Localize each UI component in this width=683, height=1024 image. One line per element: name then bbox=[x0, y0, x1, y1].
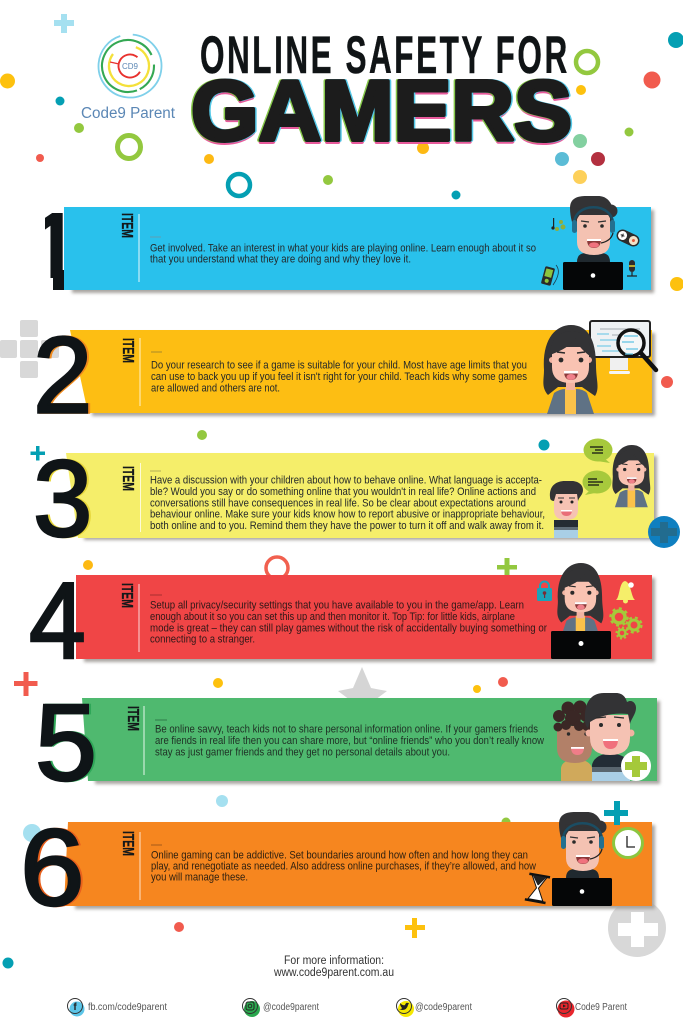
footer: more information: www.code9parent.com.au bbox=[273, 967, 394, 979]
icon: microphone bbox=[627, 260, 637, 276]
body text: Be online savvy, teach kids not to share personal information online. If your gamers friends bbox=[155, 724, 538, 736]
grey plus blocks left of item 2 bbox=[0, 320, 59, 378]
illustration: computer monitor and magnifying glass bbox=[590, 321, 656, 374]
social: twitter bbox=[396, 998, 472, 1017]
illustration: gamer with laptop bbox=[552, 812, 612, 906]
icon: bell bbox=[616, 581, 635, 604]
body text: both online and to you. Remind them they have the power to turn it off and walk away from it. bbox=[150, 520, 544, 532]
body text: behaviour online. Make sure your kids know how to report abusive or inappropriate behaviour, bbox=[150, 508, 545, 520]
item label: ITEM bbox=[124, 706, 141, 731]
title: gamers: GAMERS bbox=[190, 64, 570, 159]
illustration: curly haired child bbox=[553, 700, 592, 781]
item label: ITEM bbox=[118, 583, 135, 608]
footer: more information: For more information: bbox=[284, 955, 384, 967]
icon: green plus badge bbox=[621, 751, 651, 781]
body text bbox=[150, 242, 536, 266]
illustration: boy bbox=[550, 481, 583, 538]
body text bbox=[150, 600, 547, 646]
icon: gears bbox=[610, 608, 642, 638]
body text: ble? Would you say or do something online that you wouldn't in real life? Online actions and bbox=[150, 486, 536, 498]
title: online safety for: ONLINE SAFETY FOR bbox=[200, 27, 567, 85]
icon: game controller bbox=[615, 227, 641, 249]
social: youtube: Code9 Parent bbox=[575, 1002, 627, 1013]
item label: ITEM bbox=[119, 466, 136, 491]
social: facebook: f bbox=[73, 1002, 77, 1013]
logo: Code9 Parent bbox=[81, 32, 176, 122]
body text: Do your research to see if a game is suitable for your child. Most have age limits that you bbox=[151, 360, 527, 372]
number 3: 3 bbox=[35, 437, 94, 559]
illustration: woman bbox=[557, 563, 603, 639]
number 2: 2 bbox=[35, 313, 94, 436]
social: instagram bbox=[242, 998, 319, 1017]
illustration: woman bbox=[543, 325, 598, 414]
number 3: 3 bbox=[33, 437, 92, 559]
title: gamers: GAMERS bbox=[191, 66, 572, 161]
body text bbox=[150, 474, 545, 532]
body text bbox=[151, 850, 536, 884]
title: gamers: GAMERS bbox=[192, 64, 574, 159]
illustration: speech bubbles bbox=[582, 438, 612, 495]
icon: clock bbox=[614, 828, 642, 858]
icon: teal plus bbox=[604, 801, 628, 825]
grey plus circle bottom right bbox=[608, 899, 666, 957]
logo: Code9 Parent: CD9 bbox=[122, 62, 139, 71]
body text: play, and renegotiate as needed. Also address online purchases, if they’re allowed, and how bbox=[151, 860, 536, 872]
illustration: woman bbox=[612, 445, 650, 507]
body text: Setup all privacy/security settings that you have available to you in the game/app. Learn bbox=[150, 600, 524, 612]
body text: that you understand what they are doing and why they love it. bbox=[150, 254, 411, 266]
body text: conversations still have consequences in real life. So be clear about expectations around bbox=[150, 498, 526, 510]
panel: item 6 bbox=[20, 801, 655, 928]
body text: you will manage these. bbox=[151, 872, 248, 884]
number 4: 4 bbox=[29, 560, 86, 682]
icon: padlock bbox=[537, 582, 552, 601]
icon: hourglass bbox=[525, 872, 550, 904]
icon: music notes bbox=[551, 218, 566, 231]
number 6: 6 bbox=[20, 806, 85, 928]
number 6: 6 bbox=[22, 806, 87, 928]
body text bbox=[155, 724, 544, 758]
body text: can use to back you up if you feel it isn't right for your child. Teach kids why some games bbox=[151, 371, 527, 383]
body text: Online gaming can be addictive. Set boundaries around how often and how long they can bbox=[151, 850, 528, 862]
item label: ITEM bbox=[118, 213, 135, 238]
icon: laptop bbox=[551, 631, 611, 659]
panel: item 3 bbox=[33, 437, 680, 559]
logo: Code9 Parent: Code9 Parent bbox=[81, 105, 176, 122]
number 5: 5 bbox=[35, 682, 97, 804]
number 5: 5 bbox=[37, 682, 99, 804]
illustration: teen boy bbox=[585, 693, 636, 781]
panel: item 4 bbox=[29, 560, 655, 682]
body text: enough about it so you can set this up and then monitor it. Top Tip: for little kids, airplane bbox=[150, 611, 515, 623]
title: gamers: GAMERS bbox=[191, 64, 572, 159]
body text: connecting to a stranger. bbox=[150, 634, 255, 646]
item label: ITEM bbox=[119, 831, 136, 856]
body text: mode is great – they can still play games without the risk of accidentally buying something or bbox=[150, 622, 547, 634]
number 2: 2 bbox=[33, 313, 92, 436]
number 1 bbox=[45, 213, 64, 290]
body text: are allowed and others are not. bbox=[151, 382, 280, 394]
social: facebook bbox=[68, 998, 167, 1016]
panel: item 1 bbox=[45, 196, 656, 295]
social: youtube bbox=[556, 998, 627, 1018]
body text: stay as just gamer friends and they get no personal details about you. bbox=[155, 746, 450, 758]
body text: are fiends in real life then you can share more, but “online friends” who you don’t really know bbox=[155, 735, 544, 747]
illustration: gamer with laptop bbox=[563, 196, 623, 290]
social: instagram: @code9parent bbox=[263, 1002, 319, 1013]
social: twitter: @code9parent bbox=[415, 1002, 472, 1013]
body text bbox=[151, 360, 527, 394]
number 1: 1 bbox=[24, 192, 85, 313]
body text: Have a discussion with your children about how to behave online. What language is accepta- bbox=[150, 474, 542, 486]
panel: item 2 bbox=[33, 313, 656, 436]
social: facebook: fb.com/code9parent bbox=[88, 1002, 167, 1013]
panel: item 5 bbox=[35, 682, 660, 804]
item label: ITEM bbox=[119, 338, 136, 363]
footer: more information bbox=[273, 955, 394, 979]
icon: music player bbox=[541, 265, 558, 286]
body text: Get involved. Take an interest in what your kids are playing online. Learn enough about it so bbox=[150, 242, 536, 254]
icon: blue plus circle bbox=[648, 516, 680, 548]
